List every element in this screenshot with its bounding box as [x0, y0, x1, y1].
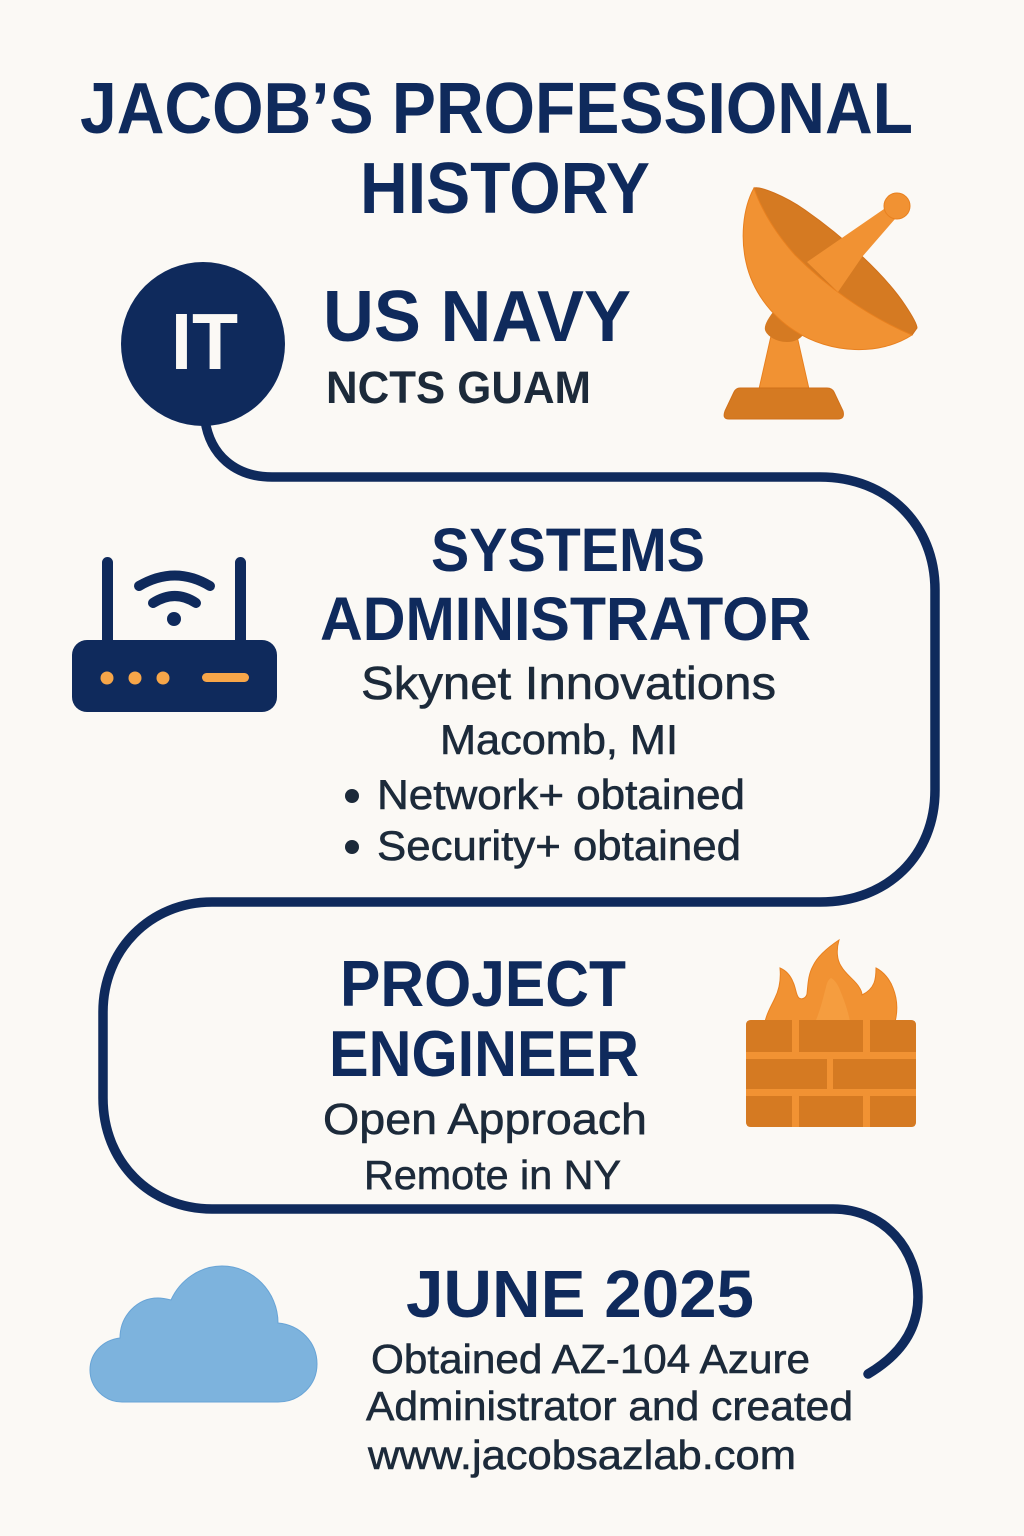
text: employer and location [361, 657, 776, 763]
heading: Project Engineer [329, 947, 639, 1090]
text: certifications list: Network+ obtained [377, 771, 745, 818]
text: employer and location: Skynet Innovations [361, 657, 776, 709]
timeline connector path [103, 420, 935, 1374]
icon: wifi router [72, 557, 277, 712]
text: certifications list: Security+ obtained [377, 822, 741, 869]
panel: US Navy [323, 277, 631, 413]
heading: US Navy: US NAVY [323, 277, 631, 357]
text: employer and location: Macomb, MI [440, 716, 678, 763]
panel: Systems Administrator [320, 516, 811, 869]
panel: Project Engineer [323, 947, 647, 1198]
heading: Project Engineer: PROJECT [340, 947, 626, 1020]
heading: Systems Administrator [320, 516, 811, 653]
heading: Project Engineer: ENGINEER [329, 1017, 639, 1090]
title: JACOB’S PROFESSIONAL [80, 69, 913, 149]
text: employer and location: Open Approach [323, 1095, 647, 1144]
text: certifications list [345, 771, 745, 869]
panel: June 2025 [366, 1257, 853, 1478]
text: NCTS Guam: NCTS GUAM [326, 362, 591, 413]
icon: IT badge: IT [171, 297, 238, 386]
heading: June 2025: JUNE 2025 [406, 1257, 754, 1332]
text: AZ-104 achievement: Administrator and created [366, 1383, 853, 1429]
icon: IT badge [121, 262, 285, 426]
text: AZ-104 achievement: www.jacobsazlab.com [367, 1432, 796, 1478]
icon: cloud [90, 1266, 317, 1402]
text: employer and location: Remote in NY [364, 1152, 621, 1198]
icon: brick firewall with flames [746, 940, 916, 1127]
text: AZ-104 achievement [366, 1336, 853, 1478]
heading: Systems Administrator: SYSTEMS [431, 516, 705, 584]
heading: Systems Administrator: ADMINISTRATOR [320, 585, 811, 653]
text: AZ-104 achievement: Obtained AZ-104 Azure [371, 1336, 810, 1382]
title: HISTORY [360, 149, 650, 229]
title [80, 69, 913, 229]
icon: satellite dish [724, 188, 917, 419]
text: employer and location [323, 1095, 647, 1198]
